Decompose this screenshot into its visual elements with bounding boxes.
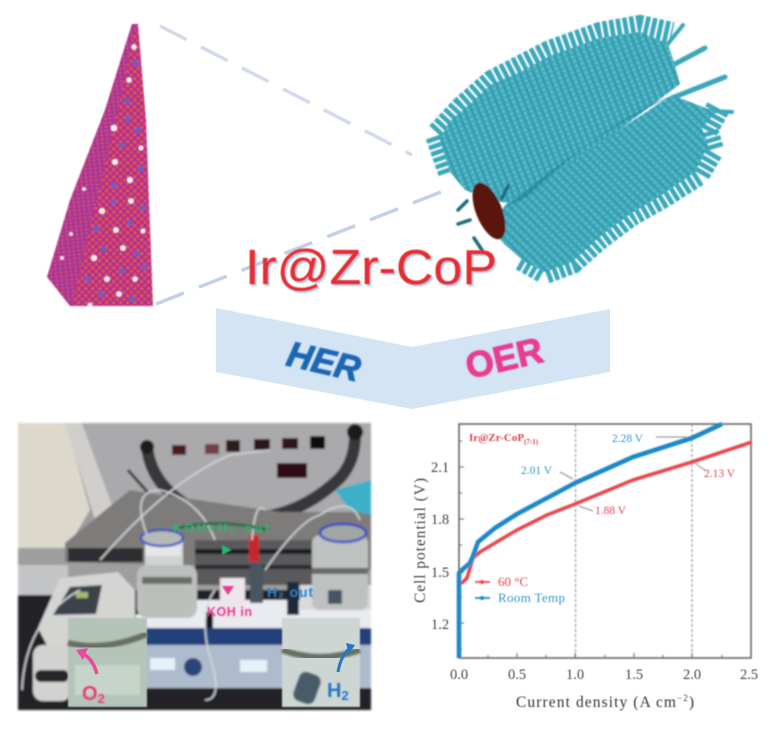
x axis title: ) <box>689 694 694 711</box>
chart: cell potential vs current density: Room Temp <box>498 590 565 605</box>
photo labels <box>173 521 313 619</box>
pump <box>38 572 135 690</box>
right jar <box>312 535 368 610</box>
legend text: 60 °C <box>498 574 528 589</box>
lower sheet <box>490 95 716 272</box>
guide lines: zoom from nanosheet to pyramid <box>156 26 446 304</box>
photo: electrolyser test setup <box>18 423 371 710</box>
tick labels <box>431 460 758 683</box>
tick labels: 1.8 <box>431 512 449 528</box>
left jar <box>145 535 183 565</box>
tick labels: 1.2 <box>431 617 449 633</box>
label: OER: OER <box>462 329 547 387</box>
value labels: 2.01 V <box>521 465 553 477</box>
sample label: Ir@Zr-CoP <box>469 432 524 444</box>
series: room temperature <box>459 424 722 658</box>
value labels: 1.88 V <box>595 505 627 517</box>
plot frame <box>459 424 751 658</box>
blue atoms <box>85 60 147 302</box>
legend lines <box>475 581 490 583</box>
dark floor <box>18 590 371 710</box>
white atoms <box>60 44 145 307</box>
dark hoses <box>147 432 355 519</box>
icon: pyramid crystal model <box>47 24 153 307</box>
inset: O2 jar <box>68 618 147 707</box>
cell <box>250 563 263 603</box>
title: Ir@Zr-CoP: Ir@Zr-CoP <box>245 241 497 295</box>
panel displays <box>172 445 186 455</box>
value labels <box>521 433 736 517</box>
photo labels: KOH+H₂ out <box>173 521 269 535</box>
inset: O2 jar: O <box>82 683 98 705</box>
tubes <box>22 450 360 700</box>
tick labels: 0.0 <box>450 667 468 683</box>
ticks <box>459 441 722 658</box>
chart: cell potential vs current density <box>412 424 758 711</box>
stirrer front <box>140 628 371 645</box>
tick labels: 1.0 <box>566 667 584 683</box>
tick labels: 0.5 <box>508 667 526 683</box>
value labels: 2.13 V <box>704 468 736 480</box>
tick labels: 1.5 <box>625 667 643 683</box>
tick labels: 1.5 <box>431 565 449 581</box>
reference lines <box>576 424 692 658</box>
icon: Zr-CoP nanowire array on carbon fibre <box>437 25 732 272</box>
label: HER: HER <box>283 335 365 390</box>
photo labels: KOH in <box>207 605 252 619</box>
stirrer white top <box>135 600 371 632</box>
wall <box>18 423 90 548</box>
x axis title: Current density (A cm <box>516 694 676 711</box>
instrument panel <box>82 423 371 520</box>
dense fringe of fibres along sheet edges <box>437 27 718 272</box>
inset: O2 jar: 2 <box>98 691 105 706</box>
tick labels: 2.1 <box>431 460 449 476</box>
tick labels: 2.5 <box>740 667 758 683</box>
x axis title: −2 <box>677 693 688 703</box>
callout leaders <box>560 437 706 511</box>
y axis title: Cell potential (V) <box>412 478 429 603</box>
photo labels: H₂ out <box>267 584 313 600</box>
carbon fibre disk <box>466 178 512 244</box>
tick labels: 2.0 <box>683 667 701 683</box>
chevron arrow: HER and OER <box>216 308 610 409</box>
bench <box>65 490 371 570</box>
inset: H2 jar: 2 <box>341 688 349 703</box>
inset: H2 jar: H <box>327 680 341 702</box>
upper sheet <box>440 32 680 205</box>
title: Ir@Zr-CoP: Ir@Zr-CoP <box>247 243 499 297</box>
inset: H2 jar <box>282 618 360 707</box>
cyan bag <box>335 480 371 515</box>
sample label: (7:1) <box>524 438 539 446</box>
fold shadow <box>505 94 676 208</box>
spikes at sheet tips <box>655 25 732 112</box>
value labels: 2.28 V <box>612 433 644 445</box>
series: 60 °C <box>459 442 752 658</box>
